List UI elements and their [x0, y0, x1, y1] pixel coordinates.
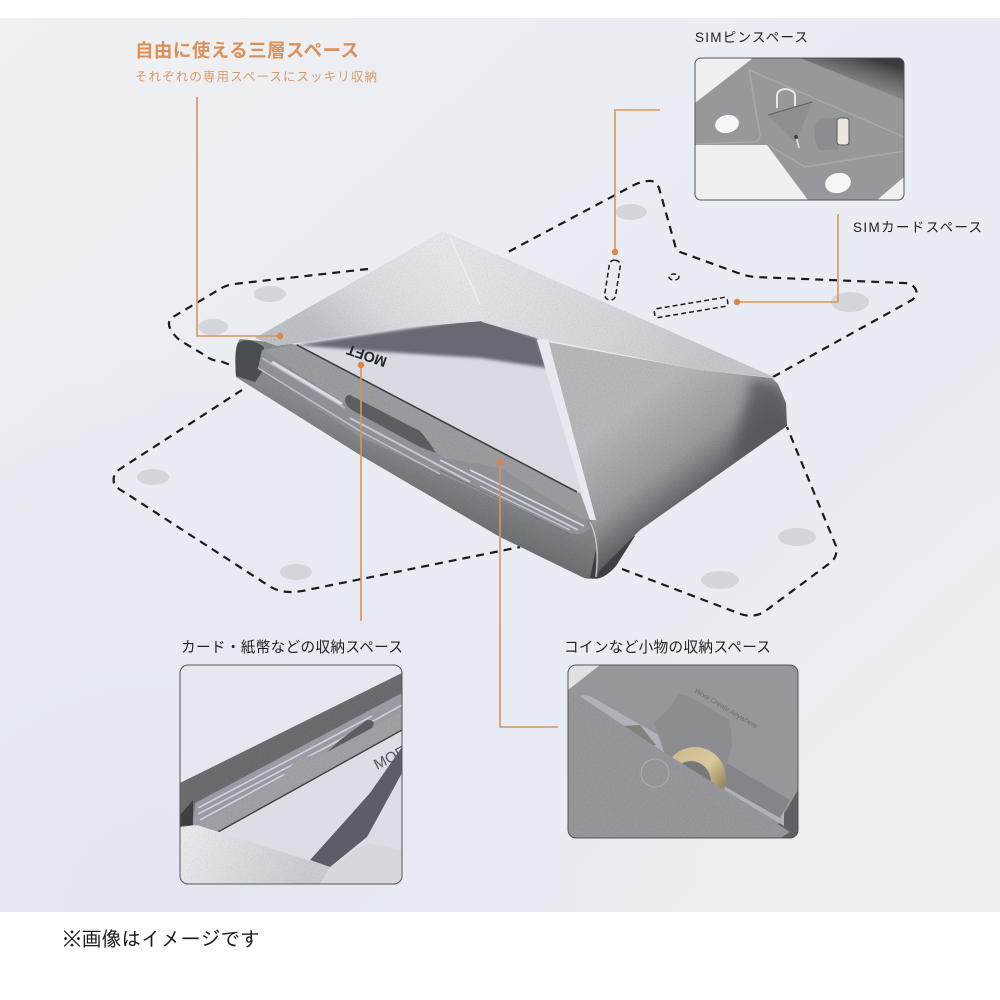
fold highlight: [450, 238, 480, 304]
label: SIM pin space: SIMピンスペース: [695, 30, 808, 45]
SIM card: [837, 118, 849, 145]
snap circle: [641, 759, 669, 787]
card edge: [218, 730, 402, 832]
card surface: [297, 320, 590, 497]
label: SIM card space: SIMカードスペース: [853, 220, 982, 235]
pin flap: [768, 102, 812, 142]
top flap right: [445, 232, 776, 378]
tagline: Work Create Anywhere: [693, 688, 759, 730]
dark inner corner: [235, 340, 264, 382]
subtitle: それぞれの専用スペースにスッキリ収納: [135, 69, 377, 84]
label: card and bill space: カード・紙幣などの収納スペース: [181, 639, 403, 656]
label: coin space: コインなど小物の収納スペース: [564, 639, 771, 656]
footnote: ※画像はイメージです: [62, 929, 260, 949]
clear sleeves: [192, 693, 402, 828]
panel: card and bill space: [180, 665, 409, 884]
slot: [574, 695, 784, 826]
pale top left corner: [568, 665, 600, 690]
wallet illustration: [235, 232, 787, 579]
orange callout lines: [197, 97, 838, 727]
dark tip of right flap: [730, 378, 787, 466]
holes: [715, 114, 739, 134]
pull tab notch: [345, 395, 436, 453]
lower crease: [590, 522, 597, 577]
pull tab: [654, 694, 732, 766]
dark card edge line: [297, 345, 577, 492]
gold coin: [672, 747, 726, 790]
dashed slots: SIM pin and SIM card: [604, 259, 728, 318]
card surface: [220, 731, 402, 864]
front plate: [568, 690, 790, 838]
title: 自由に使える三層スペース: [135, 40, 359, 61]
fabric band and notch: [206, 736, 390, 832]
gray snap dots: [137, 204, 869, 589]
clear card sleeves: [258, 345, 590, 534]
right shadow corner: [778, 791, 798, 838]
SIM pin loop: [777, 89, 795, 108]
SIM card bump: [815, 118, 838, 150]
pocket fabric band: [263, 344, 590, 520]
logo fragment: MOF: [371, 743, 409, 774]
card panel border: [180, 665, 402, 884]
dark front tip: [590, 530, 635, 579]
flap white edge highlight: [537, 339, 596, 520]
lower right flap: [330, 866, 331, 867]
gray unfolded sheet: [695, 58, 904, 200]
wallet dark band: [180, 673, 402, 830]
dark tab: [327, 720, 374, 752]
SIM panel border: [695, 58, 904, 200]
logo: MOFT: [345, 341, 389, 369]
shadow beside tab: [722, 762, 790, 818]
dark left corner: [180, 800, 193, 826]
panel: SIM pin space: [695, 58, 904, 200]
top flap left: [255, 232, 483, 346]
orange callout dots: [277, 249, 740, 465]
dashed unfolded outline: [114, 181, 917, 616]
front flap: [180, 825, 330, 884]
coin panel border: [568, 665, 798, 838]
silver coin: [624, 725, 656, 746]
right folded flap: [537, 340, 787, 577]
dark shadow: [310, 747, 402, 867]
shadow under top flap: [296, 318, 547, 368]
fold lines: [695, 70, 904, 167]
pin head: [796, 136, 799, 148]
panel: coin space: [568, 665, 798, 838]
wallet underside band: [236, 339, 612, 579]
